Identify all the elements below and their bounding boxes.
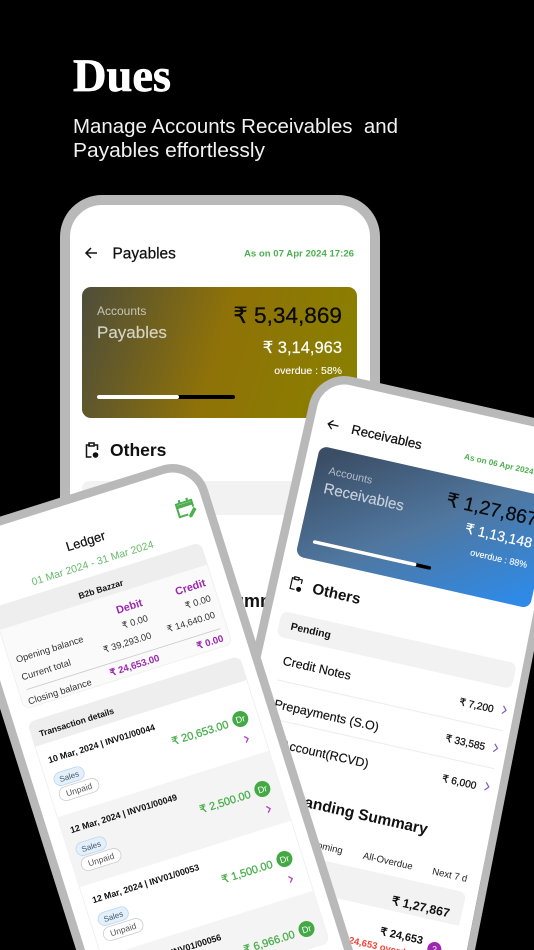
row: prepayments: Prepayments (S.O) (273, 697, 380, 734)
panel: balance summary: B2b Bazzar (77, 577, 125, 601)
card: accounts receivables: ₹ 1,13,148 (463, 521, 534, 552)
row: invoice 00053: ₹ 1,500.00 (220, 859, 274, 886)
card: accounts payables: Accounts (97, 304, 146, 318)
row: invoice 00056 (171, 921, 314, 950)
icon: clipboard clock (86, 443, 98, 458)
row: credit notes (278, 654, 509, 731)
panel: balance summary: Credit (174, 577, 208, 598)
panel: balance summary: ₹ 0.00 (121, 613, 149, 631)
tabs: Upcoming (299, 837, 344, 857)
panel: balance summary: Current total (20, 657, 72, 682)
panel: pending header: Pending (289, 622, 332, 641)
heading: outstanding summary: Outstanding Summary (110, 591, 303, 611)
screen title: ledger: Ledger (64, 528, 108, 554)
panel: transaction details (28, 656, 330, 950)
heading: outstanding summary: Outstanding Summary (263, 785, 430, 838)
panel: balance summary: ₹ 24,653.00 (109, 653, 161, 679)
panel: balance summary: ₹ 39,293.00 (102, 630, 152, 655)
row: invoice 00049: Dr (256, 783, 268, 795)
card: accounts payables: overdue : 58% (274, 365, 342, 377)
row: invoice 00056: Dr (301, 923, 313, 935)
card: accounts receivables: overdue : 88% (469, 547, 528, 570)
date range: 01 Mar 2024 - 31 Mar 2024 (30, 539, 155, 588)
icon: calendar edit (174, 498, 196, 518)
timestamp: As on 07 Apr 2024 17:26 (244, 248, 354, 260)
panel: balance summary (0, 543, 232, 709)
row: invoice 00044: 10 Mar, 2024 | INV01/00044 (47, 722, 156, 765)
panel: balance summary: Debit (115, 597, 145, 617)
card: accounts payables: Payables (97, 323, 167, 342)
card: accounts payables: ₹ 3,14,963 (263, 339, 342, 357)
row: invoice 00044: Sales (58, 769, 80, 784)
panel: transaction details: Transaction details (38, 706, 115, 739)
panel: balance summary: ₹ 14,640.00 (166, 610, 216, 634)
card: accounts receivables: Accounts (328, 465, 374, 487)
row: invoice 00053: Unpaid (109, 921, 138, 938)
row: invoice 00049: 12 Mar, 2024 | INV01/00049 (69, 792, 178, 835)
row: prepayments: ₹ 33,585 (444, 733, 486, 753)
row: credit notes: Credit Notes (282, 654, 352, 683)
panel: balance summary: ₹ 0.00 (196, 633, 225, 652)
row: invoice 00044 (48, 711, 249, 801)
receivables phone right edge (456, 600, 534, 950)
row: account rcvd (287, 740, 490, 791)
row: invoice 00053: Dr (278, 853, 291, 865)
row: invoice 00049: Sales (80, 839, 102, 854)
row: account rcvd: Account(RCVD) (280, 738, 370, 771)
screen title: payables: Payables (112, 246, 176, 262)
tabs: Next 7 days (431, 866, 483, 888)
row: invoice 00049 (70, 781, 271, 871)
screen title: receivables: Receivables (350, 422, 424, 452)
row: prepayments (269, 694, 500, 769)
row: credit notes: ₹ 7,200 (458, 697, 495, 716)
row: invoice 00044: ₹ 20,653.00 (170, 719, 230, 748)
icon: back arrow (327, 420, 339, 430)
subtitle: Payables effortlessly (73, 140, 266, 162)
title: Dues (73, 50, 171, 102)
panel: balance summary: Closing balance (27, 677, 93, 706)
row: invoice 00044: Unpaid (65, 781, 94, 798)
row: account rcvd: ₹ 6,000 (441, 774, 478, 792)
panel: balance summary: ₹ 0.00 (184, 593, 212, 611)
card: accounts payables: ₹ 5,34,869 (233, 303, 342, 328)
card: accounts receivables (295, 446, 534, 609)
row: invoice 00049: ₹ 2,500.00 (198, 789, 252, 816)
panel: summary (325, 861, 465, 950)
subtitle (73, 116, 398, 162)
row: invoice 00053 (92, 851, 293, 941)
phone: receivables (256, 376, 534, 950)
tabs (320, 844, 468, 882)
phone: payables (60, 195, 380, 642)
card: accounts receivables: Receivables (322, 480, 405, 515)
panel: balance summary: Opening balance (15, 634, 85, 665)
panel: pending header (276, 611, 517, 689)
tabs: All-Overdue (362, 851, 414, 873)
card: accounts payables (82, 287, 357, 418)
panel: pending (82, 481, 292, 515)
heading: others: Others (311, 581, 362, 608)
row: invoice 00049: Unpaid (87, 851, 116, 868)
panel: summary: ₹ 1,27,867 (390, 894, 451, 920)
subtitle: Manage Accounts Receivables and (73, 116, 398, 138)
row: invoice 00044: Dr (234, 713, 246, 725)
icon: back arrow (86, 248, 97, 258)
row: invoice 00053: Sales (102, 909, 124, 924)
phone: ledger (0, 460, 362, 950)
icon: clipboard clock (290, 576, 304, 592)
row: invoice 00053: 12 Mar, 2024 | INV01/00053 (91, 862, 200, 905)
heading: others: Others (110, 440, 167, 460)
panel: summary: ₹ 24,653 (379, 926, 424, 947)
